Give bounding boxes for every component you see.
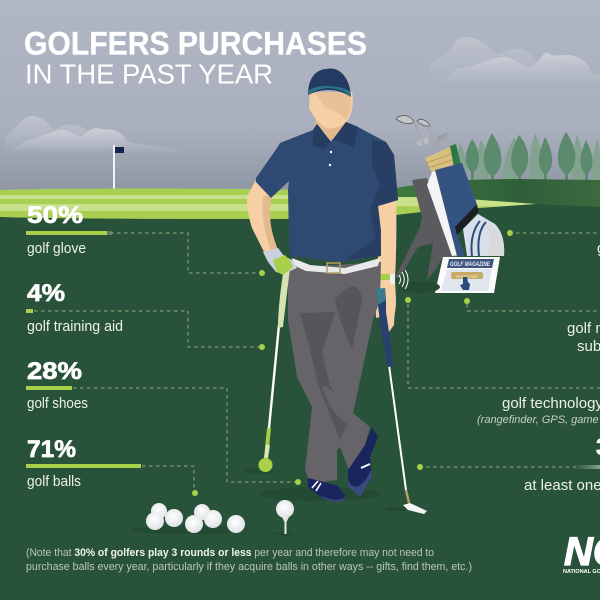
club: left iron <box>258 268 290 472</box>
tree line <box>457 132 600 181</box>
bag pocket <box>463 214 504 256</box>
tablet: golf magazine: SUBSCRIBE <box>456 274 478 279</box>
note: purchase balls every year, particularly if they acquire balls in other ways -- gifts, find them, etc.) <box>26 561 472 573</box>
shirt <box>256 122 398 262</box>
tablet: golf magazine <box>435 257 500 293</box>
bag top <box>425 147 453 173</box>
bag body <box>435 163 478 256</box>
left clouds <box>5 116 183 153</box>
bag white side <box>427 171 462 256</box>
golfer <box>247 69 408 502</box>
club heads <box>396 116 448 154</box>
stat: golf glove 50% <box>26 202 265 276</box>
sky background <box>0 0 600 200</box>
stat: golf magazine subscription <box>464 298 600 355</box>
title: GOLFERS PURCHASES <box>24 26 367 62</box>
stat: golf shoes 28%: golf shoes <box>27 395 88 412</box>
neck <box>315 118 348 140</box>
trouser folds <box>300 312 350 440</box>
stat: golf training aid 4% <box>26 280 265 350</box>
glove <box>263 248 297 275</box>
flag <box>113 145 124 193</box>
shirt shadows <box>345 140 398 260</box>
face <box>309 92 353 128</box>
golf ball on tee <box>276 500 294 534</box>
stat: golf balls 71%: golf balls <box>27 473 81 490</box>
stat: golf glove 50%: 50% <box>27 202 83 229</box>
note: (Note that 30% of golfers play 3 rounds or less per year and therefore may not need to <box>26 547 434 559</box>
title <box>24 26 367 90</box>
cap <box>308 69 351 97</box>
shoes <box>308 427 378 502</box>
hill right <box>396 179 600 210</box>
stat: golf technology <box>405 297 600 426</box>
stat: at least one <box>417 434 600 494</box>
stat: golf shoes 28%: 28% <box>27 358 82 385</box>
right clouds <box>430 37 600 83</box>
wireless icon <box>390 270 408 289</box>
stat: top right clipped <box>507 230 600 257</box>
stat: golf balls 71%: 71% <box>27 436 76 463</box>
tablet: golf magazine: GOLF MAGAZINE <box>450 262 491 268</box>
trousers <box>288 262 381 482</box>
bag stand <box>395 178 457 280</box>
stat: golf training aid 4%: 4% <box>27 280 65 307</box>
right arm and hand <box>375 200 396 332</box>
bag strap <box>455 205 479 235</box>
wristband <box>380 274 395 280</box>
left arm <box>247 180 278 252</box>
stat: golf glove 50%: golf glove <box>27 240 86 257</box>
stat: golf training aid 4%: golf training aid <box>27 318 123 335</box>
golf balls <box>146 503 245 533</box>
stat: golf shoes 28% <box>26 358 301 485</box>
note <box>26 547 472 573</box>
golf bag <box>395 116 504 280</box>
ground <box>0 205 600 600</box>
fairway <box>0 188 600 219</box>
club: putter <box>376 288 427 514</box>
belt <box>292 258 380 274</box>
stat: golf technology: golf technology <box>502 395 600 412</box>
ground shadows <box>130 281 440 536</box>
title: IN THE PAST YEAR <box>25 58 273 90</box>
stat: golf balls 71% <box>26 436 198 496</box>
